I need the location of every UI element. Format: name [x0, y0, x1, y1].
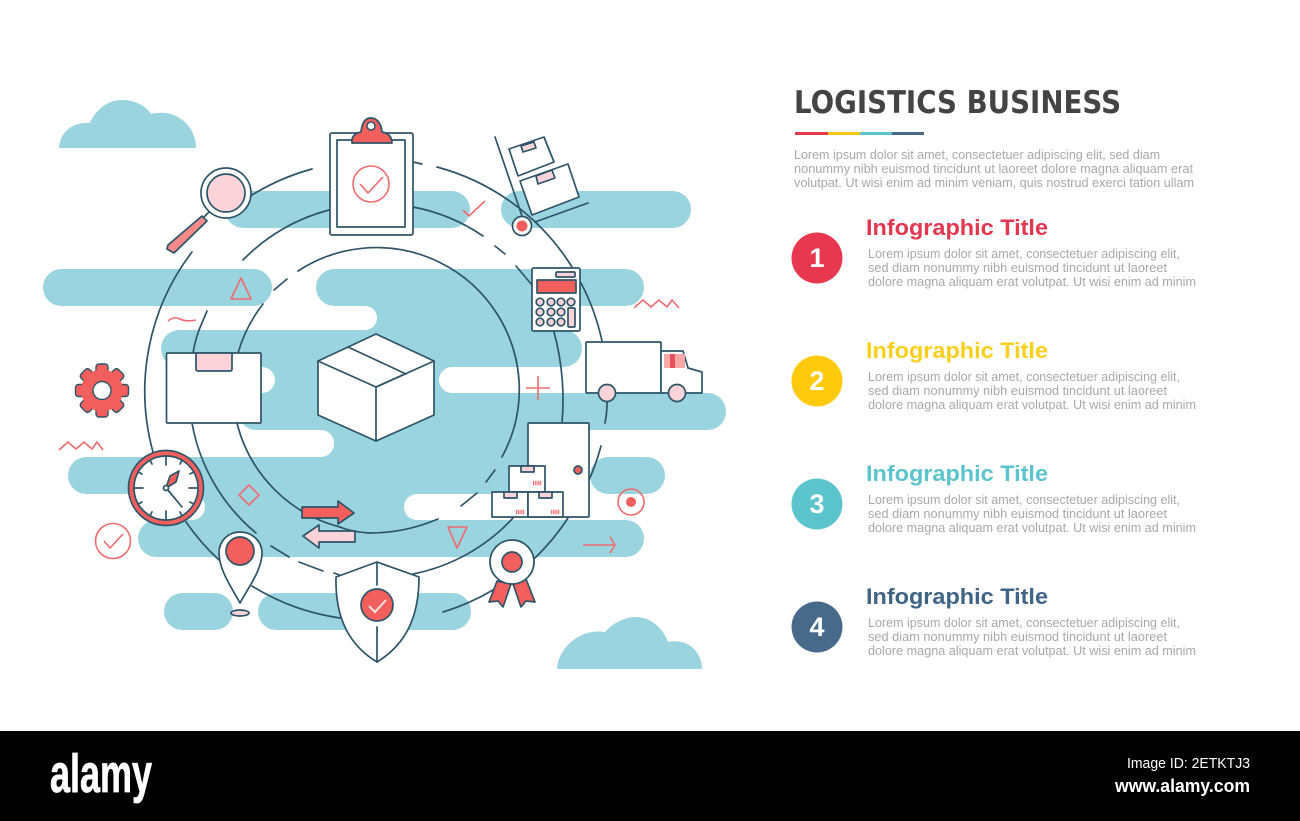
- item 1: [792, 215, 1196, 289]
- item 2: 2: [809, 366, 825, 396]
- item 3: 3: [809, 489, 825, 519]
- icon: award ribbon: [489, 540, 535, 607]
- item 3: [792, 461, 1196, 535]
- icon: calculator: [532, 268, 580, 331]
- intro text: volutpat. Ut wisi enim ad minim veniam, quis nostrud exerci tation ullam: [794, 176, 1194, 190]
- icon: gear: [76, 364, 128, 417]
- background: teal stripes and clouds: [43, 100, 759, 669]
- icon: location pin: [219, 532, 262, 616]
- item 2: [792, 338, 1196, 412]
- small red decorations: [59, 201, 679, 558]
- title colour underline: [795, 132, 924, 135]
- item 2: Infographic Title: [866, 338, 1048, 363]
- icon: hand truck with boxes: [495, 137, 588, 236]
- item 4: [792, 584, 1196, 658]
- footer: watermark bar: [0, 731, 1300, 821]
- icon: clipboard: [330, 118, 413, 235]
- icon: door with stacked boxes: [492, 423, 589, 517]
- footer: watermark bar: www.alamy.com: [1114, 776, 1250, 796]
- icon: box (left): [166, 353, 261, 423]
- item 2: sed diam nonummy nibh euismod tincidunt ut laoreet: [868, 384, 1168, 398]
- item 4: sed diam nonummy nibh euismod tincidunt ut laoreet: [868, 630, 1168, 644]
- item 1: 1: [809, 243, 825, 273]
- icon: shield: [336, 562, 419, 662]
- circular dashed orbit lines: [145, 162, 607, 618]
- item 2: Lorem ipsum dolor sit amet, consectetuer adipiscing elit,: [868, 370, 1180, 384]
- item 4: 4: [809, 612, 825, 642]
- item 1: sed diam nonummy nibh euismod tincidunt ut laoreet: [868, 261, 1168, 275]
- intro text: Lorem ipsum dolor sit amet, consectetuer adipiscing elit, sed diam: [794, 148, 1160, 162]
- item 3: dolore magna aliquam erat volutpat. Ut wisi enim ad minim: [868, 521, 1196, 535]
- item 2: dolore magna aliquam erat volutpat. Ut wisi enim ad minim: [868, 398, 1196, 412]
- item 1: Lorem ipsum dolor sit amet, consectetuer adipiscing elit,: [868, 247, 1180, 261]
- footer: watermark bar: alamy: [50, 744, 152, 804]
- icon: central open box: [318, 334, 434, 441]
- item 3: Lorem ipsum dolor sit amet, consectetuer adipiscing elit,: [868, 493, 1180, 507]
- item 1: dolore magna aliquam erat volutpat. Ut wisi enim ad minim: [868, 275, 1196, 289]
- item 3: Infographic Title: [866, 461, 1048, 486]
- icon: exchange arrows: [302, 501, 355, 548]
- intro text: [794, 148, 1194, 190]
- item 3: sed diam nonummy nibh euismod tincidunt ut laoreet: [868, 507, 1168, 521]
- item 4: Lorem ipsum dolor sit amet, consectetuer adipiscing elit,: [868, 616, 1180, 630]
- item 4: dolore magna aliquam erat volutpat. Ut wisi enim ad minim: [868, 644, 1196, 658]
- item 1: Infographic Title: [866, 215, 1048, 240]
- footer: watermark bar: Image ID: 2ETKTJ3: [1127, 755, 1250, 772]
- item 4: Infographic Title: [866, 584, 1048, 609]
- intro text: nonummy nibh euismod tincidunt ut laoreet dolore magna aliquam erat: [794, 162, 1194, 176]
- icon: delivery truck: [586, 342, 702, 402]
- icon: magnifier: [167, 168, 251, 253]
- icon: clock: [128, 450, 204, 526]
- title: LOGISTICS BUSINESS: [794, 85, 1121, 121]
